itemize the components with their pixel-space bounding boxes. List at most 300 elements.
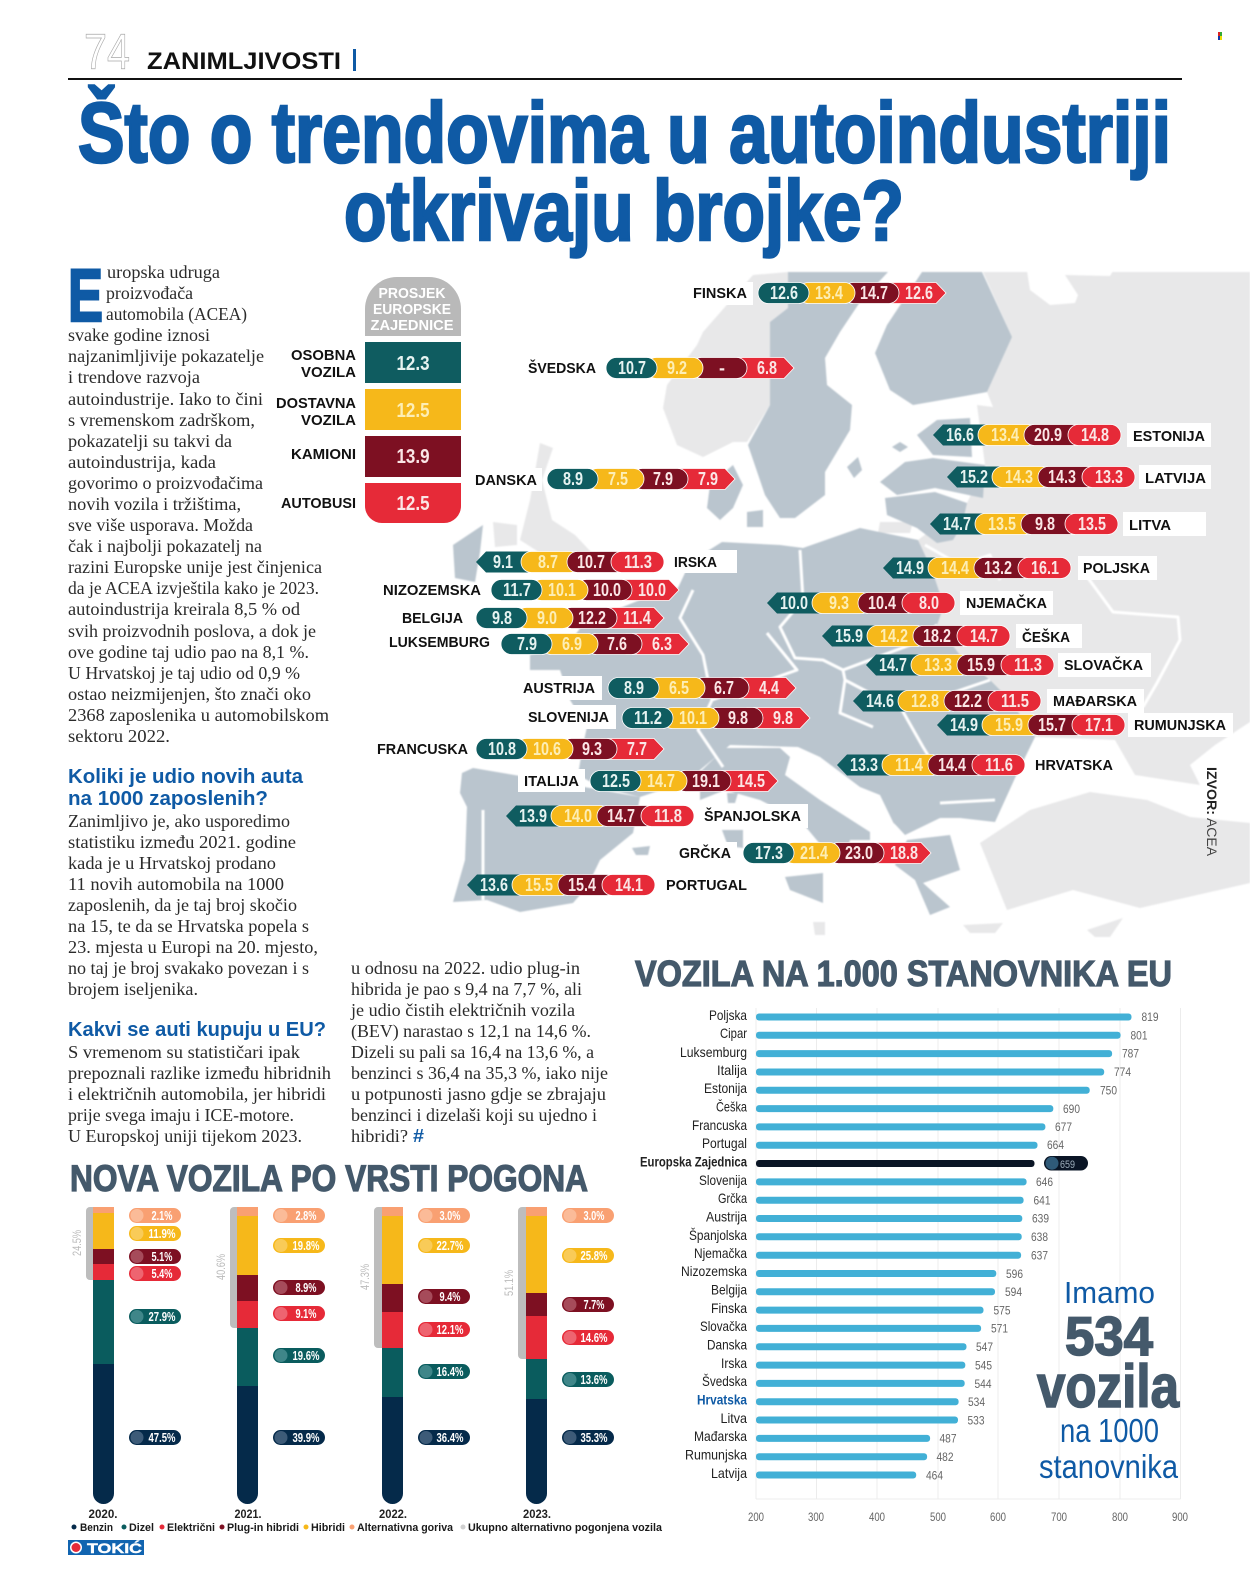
stacked bar 2021: 2021. <box>234 1507 262 1521</box>
bar chart: vehicles per 1000 inhabitants: 641 <box>1034 1194 1051 1208</box>
bar chart: vehicles per 1000 inhabitants: 500 <box>930 1510 946 1524</box>
row: Luksemburg <box>389 634 689 654</box>
bar chart: vehicles per 1000 inhabitants: Belgija <box>711 1282 747 1298</box>
row: Slovačka: 15.9 <box>967 655 995 675</box>
row: Češka: 14.2 <box>880 626 908 646</box>
intro text block: automobila (ACEA) <box>106 304 247 325</box>
bar chart: vehicles per 1000 inhabitants: 750 <box>1100 1084 1117 1098</box>
legend: EU average: VOZILA <box>301 364 356 381</box>
heading: new cars per 1000 employees: Koliki je udio novih auta <box>68 766 304 788</box>
row: Švedska: 9.2 <box>667 358 687 378</box>
row: Nizozemska: 10.1 <box>548 580 576 600</box>
bar chart: vehicles per 1000 inhabitants: 700 <box>1051 1510 1067 1524</box>
legend: EU average: KAMIONI <box>291 446 356 463</box>
text block: new cars per 1000 employees: no taj je broj svakako povezan i s <box>68 958 309 978</box>
bar chart: vehicles per 1000 inhabitants: 482 <box>936 1450 954 1464</box>
row: Mađarska: 12.8 <box>911 691 939 711</box>
text block: which cars are bought: prepoznali razlike između hibridnih <box>68 1063 331 1083</box>
row: Italija: 14.5 <box>737 771 765 791</box>
chart legend: Električni <box>167 1522 215 1534</box>
legend: EU average: 12.3 <box>396 353 430 375</box>
row: Austrija: 6.7 <box>714 678 734 698</box>
row: Rumunjska: 15.7 <box>1038 715 1066 735</box>
stacked bar 2020: 2.1% <box>152 1208 173 1223</box>
chart legend: Hibridi <box>311 1522 345 1534</box>
row: Latvija: 14.3 <box>1048 467 1076 487</box>
intro text block: ostao neizmijenjen, što znači oko <box>68 684 311 704</box>
row: Švedska: - <box>719 358 725 378</box>
bar chart: vehicles per 1000 inhabitants: 787 <box>1122 1046 1139 1060</box>
row: Italija: 12.5 <box>602 771 630 791</box>
title <box>78 85 1171 259</box>
row: Austrija <box>518 676 796 700</box>
text block: second column <box>350 958 608 1146</box>
source note <box>1204 767 1220 857</box>
bar chart: vehicles per 1000 inhabitants: Slovenija <box>699 1172 747 1188</box>
bar chart: vehicles per 1000 inhabitants: 545 <box>975 1358 992 1372</box>
row: Francuska: 7.7 <box>627 739 647 759</box>
bar chart: vehicles per 1000 inhabitants: 638 <box>1031 1230 1048 1244</box>
row: Portugal: 15.5 <box>525 875 553 895</box>
intro text block: E <box>68 254 103 337</box>
row: Francuska: 10.8 <box>488 739 516 759</box>
row: Portugal: 15.4 <box>568 875 596 895</box>
legend: EU average <box>276 277 461 523</box>
row: Hrvatska: HRVATSKA <box>1035 757 1113 774</box>
callout: 534 vehicles <box>1037 1275 1180 1485</box>
intro text block: čak i najbolji pokazatelj na <box>68 536 262 556</box>
legend: EU average: AUTOBUSI <box>281 495 356 512</box>
chart legend <box>72 1522 663 1534</box>
row: Njemačka: 8.0 <box>919 593 939 613</box>
row: Nizozemska <box>383 580 679 600</box>
row: Švedska: 6.8 <box>757 358 777 378</box>
intro text block: razini Europske unije jest činjenica <box>68 557 322 577</box>
intro text block: proizvođača <box>106 283 193 303</box>
row: Poljska: 14.9 <box>896 558 924 578</box>
row: Nizozemska: 11.7 <box>503 580 531 600</box>
row: Slovačka <box>866 653 1151 677</box>
stacked bar 2023: 25.8% <box>580 1248 608 1263</box>
stacked bar 2022: 16.4% <box>436 1364 464 1379</box>
row: Latvija: 15.2 <box>960 467 988 487</box>
row: Hrvatska: 11.4 <box>895 755 923 775</box>
text block: second column: # <box>413 1126 424 1146</box>
row: Francuska: 10.6 <box>533 739 561 759</box>
row: Irska: 8.7 <box>538 552 558 572</box>
row: Luksemburg: 6.3 <box>652 634 672 654</box>
bar chart: vehicles per 1000 inhabitants: 575 <box>994 1304 1011 1318</box>
chart legend: Benzin <box>80 1522 113 1534</box>
stacked bar 2021: 9.1% <box>296 1306 317 1321</box>
row: Mađarska: MAĐARSKA <box>1053 693 1137 710</box>
row: Nizozemska: NIZOZEMSKA <box>383 582 481 599</box>
bar chart: vehicles per 1000 inhabitants: 596 <box>1006 1267 1023 1281</box>
logo: Tokić: TOKIĆ <box>87 1539 142 1556</box>
row: Estonija: 20.9 <box>1034 425 1062 445</box>
text block: new cars per 1000 employees: 23. mjesta u Europi na 20. mjesto, <box>68 937 318 957</box>
row: Francuska: FRANCUSKA <box>377 741 468 758</box>
row: Luksemburg: 6.9 <box>562 634 582 654</box>
row: Finska <box>683 282 946 305</box>
stacked bar 2021: 19.6% <box>292 1348 320 1363</box>
row: Latvija <box>947 465 1211 489</box>
row: Slovenija: 11.2 <box>634 708 662 728</box>
row: Danska: 7.9 <box>653 469 673 489</box>
intro text block: i trendove razvoja <box>68 367 200 387</box>
row: Španjolska <box>506 804 808 828</box>
intro text block <box>68 254 329 746</box>
row: Njemačka <box>767 591 1053 615</box>
stacked bar 2020: 5.1% <box>152 1249 173 1264</box>
row: Irska: 9.1 <box>493 552 513 572</box>
row: Slovenija: 9.8 <box>773 708 793 728</box>
bar chart: vehicles per 1000 inhabitants: Poljska <box>709 1007 747 1023</box>
row: Hrvatska: 14.4 <box>938 755 966 775</box>
row: Finska: 13.4 <box>815 283 843 303</box>
bar chart: vehicles per 1000 inhabitants: Francuska <box>692 1117 747 1133</box>
intro text block: autoindustrija, kada <box>68 452 216 472</box>
row: Finska: 14.7 <box>860 283 888 303</box>
bar chart: vehicles per 1000 inhabitants: 819 <box>1142 1010 1159 1024</box>
stacked bar 2020: 2020. <box>88 1507 118 1521</box>
row: Slovačka: SLOVAČKA <box>1064 656 1143 674</box>
row: Belgija: 12.2 <box>578 608 606 628</box>
bar chart: vehicles per 1000 inhabitants: 659 <box>1060 1159 1075 1171</box>
bar chart: vehicles per 1000 inhabitants: 900 <box>1172 1510 1188 1524</box>
text block: which cars are bought: S vremenom su statističari ipak <box>68 1042 300 1062</box>
row: Litva: 9.8 <box>1035 514 1055 534</box>
bar chart: vehicles per 1000 inhabitants: Irska <box>721 1355 747 1371</box>
stacked bar 2020 <box>70 1207 181 1521</box>
text block: second column: hibrida je pao s 9,4 na 7,7 %, ali <box>351 979 582 999</box>
bar chart: vehicles per 1000 inhabitants: Češka <box>716 1098 747 1114</box>
stacked bar 2023: 2023. <box>523 1507 551 1521</box>
row: Slovačka: 13.3 <box>924 655 952 675</box>
row: Njemačka: 10.0 <box>780 593 808 613</box>
colour registration mark <box>1218 32 1222 40</box>
stacked bar 2020: 24.5% <box>70 1230 84 1256</box>
intro text block: autoindustrije. Iako to čini <box>68 389 263 409</box>
bar chart: vehicles per 1000 inhabitants: Cipar <box>720 1025 747 1041</box>
legend: EU average: PROSJEK <box>378 285 446 302</box>
row: Grčka: GRČKA <box>679 844 731 862</box>
bar chart: vehicles per 1000 inhabitants: Hrvatska <box>697 1392 747 1408</box>
bar chart: vehicles per 1000 inhabitants: 639 <box>1032 1212 1049 1226</box>
row: Belgija: 9.0 <box>537 608 557 628</box>
bar chart: vehicles per 1000 inhabitants: Portugal <box>702 1135 747 1151</box>
row: Španjolska: 14.7 <box>607 806 635 826</box>
row: Finska: FINSKA <box>693 285 747 302</box>
bar chart: vehicles per 1000 inhabitants: 400 <box>869 1510 885 1524</box>
stacked bar 2022: 9.4% <box>440 1289 461 1304</box>
row: Italija: 14.7 <box>647 771 675 791</box>
bar chart: vehicles per 1000 inhabitants: 594 <box>1005 1285 1022 1299</box>
intro text block: uropska udruga <box>107 262 220 282</box>
text block: second column: benzinci s 36,4 na 35,3 %, iako nije <box>351 1063 608 1083</box>
heading: new cars per 1000 employees <box>68 766 304 810</box>
stacked bar 2023: 35.3% <box>580 1430 608 1445</box>
bar chart: vehicles per 1000 inhabitants: Europska Zajednica <box>640 1154 747 1170</box>
row: Grčka: 23.0 <box>845 843 873 863</box>
intro text block: sektoru 2022. <box>68 726 170 746</box>
row: Slovenija <box>522 705 810 729</box>
stacked bar 2022: 36.4% <box>436 1430 464 1445</box>
intro text block: novih vozila i tržištima, <box>68 494 241 514</box>
row: Danska: 8.9 <box>563 469 583 489</box>
row: Litva: 13.5 <box>1078 514 1106 534</box>
row: Rumunjska: RUMUNJSKA <box>1134 717 1226 734</box>
row: Slovačka: 14.7 <box>879 655 907 675</box>
bar chart: vehicles per 1000 inhabitants: 774 <box>1114 1065 1131 1079</box>
text block: second column: je udio čistih električnih vozila <box>350 1000 575 1020</box>
bar chart: vehicles per 1000 inhabitants: 464 <box>926 1468 943 1482</box>
stacked bar 2023: 14.6% <box>580 1330 608 1345</box>
title: otkrivaju brojke? <box>344 164 904 259</box>
text block: new cars per 1000 employees: statistiku između 2021. godine <box>68 832 296 852</box>
row: Slovenija: 9.8 <box>728 708 748 728</box>
text block: new cars per 1000 employees: zaposlenih, da je taj broj skočio <box>68 895 297 915</box>
map of Europe <box>453 271 1250 937</box>
row: Rumunjska <box>937 713 1233 737</box>
row: Austrija: 6.5 <box>669 678 689 698</box>
row: Mađarska <box>853 689 1144 713</box>
row: Grčka <box>673 842 931 865</box>
bar chart: vehicles per 1000 inhabitants: Rumunjska <box>685 1446 747 1462</box>
logo: Tokić <box>68 1539 144 1556</box>
text block: second column: benzinci i dizelaši koji su ujedno i <box>351 1105 597 1125</box>
row: Portugal: PORTUGAL <box>666 877 747 894</box>
bar chart: vehicles per 1000 inhabitants <box>640 1007 1188 1524</box>
row: Danska <box>470 468 735 491</box>
heading: which cars are bought: Kakvi se auti kupuju u EU? <box>68 1019 326 1041</box>
row: Litva <box>930 512 1206 536</box>
row: Estonija: 13.4 <box>991 425 1019 445</box>
intro text block: autoindustrija kreirala 8,5 % od <box>68 599 300 619</box>
intro text block: najzanimljivije pokazatelje <box>68 346 264 366</box>
row: Luksemburg: 7.9 <box>517 634 537 654</box>
row: Poljska <box>883 556 1157 580</box>
bar chart: vehicles per 1000 inhabitants: Slovačka <box>700 1318 747 1334</box>
row: Belgija: 11.4 <box>623 608 651 628</box>
row: Latvija: LATVIJA <box>1145 470 1206 487</box>
row: Češka <box>822 624 1082 648</box>
intro text block: U Hrvatskoj je taj udio od 0,9 % <box>68 663 300 683</box>
legend: EU average: 12.5 <box>396 493 430 515</box>
chart legend: Ukupno alternativno pogonjena vozila <box>468 1522 663 1534</box>
chart legend: Alternativna goriva <box>357 1522 454 1534</box>
bar chart: vehicles per 1000 inhabitants: Mađarska <box>694 1428 747 1444</box>
bar chart: vehicles per 1000 inhabitants: 646 <box>1036 1175 1053 1189</box>
callout: 534 vehicles: vozila <box>1037 1353 1180 1420</box>
legend: EU average: ZAJEDNICE <box>370 317 454 334</box>
text block: which cars are bought: U Europskoj uniji tijekom 2023. <box>68 1126 302 1146</box>
bar chart: vehicles per 1000 inhabitants: Estonija <box>704 1080 747 1096</box>
row: Češka: 15.9 <box>835 626 863 646</box>
row: Portugal: 13.6 <box>480 875 508 895</box>
row: Latvija: 13.3 <box>1095 467 1123 487</box>
text block: second column: Dizeli su pali sa 16,4 na 13,6 %, a <box>351 1042 594 1062</box>
bar chart: vehicles per 1000 inhabitants: 534 <box>968 1395 985 1409</box>
row: Španjolska: 11.8 <box>654 806 682 826</box>
text block: which cars are bought: prije svega imaju i ICE-motore. <box>68 1105 294 1125</box>
row: Luksemburg: LUKSEMBURG <box>389 634 490 651</box>
row: Irska: 11.3 <box>624 552 652 572</box>
stacked bar 2023: 7.7% <box>584 1297 605 1312</box>
row: Hrvatska: 13.3 <box>850 755 878 775</box>
row: Austrija: 8.9 <box>624 678 644 698</box>
bar chart: vehicles per 1000 inhabitants: 690 <box>1063 1102 1080 1116</box>
row: Španjolska: 13.9 <box>519 806 547 826</box>
source note: IZVOR: <box>1204 767 1220 815</box>
intro text block: s vremenskom zadrškom, <box>68 410 255 430</box>
row: Luksemburg: 7.6 <box>607 634 627 654</box>
bar chart: vehicles per 1000 inhabitants: Španjolska <box>689 1227 747 1243</box>
text block: new cars per 1000 employees: 11 novih automobila na 1000 <box>68 874 284 894</box>
row: Litva: 13.5 <box>988 514 1016 534</box>
row: Poljska: 14.4 <box>941 558 969 578</box>
row: Hrvatska <box>837 753 1119 777</box>
intro text block: sve više usporava. Možda <box>68 515 253 535</box>
bar chart: vehicles per 1000 inhabitants: Nizozemska <box>681 1263 747 1279</box>
row: Slovenija: 10.1 <box>679 708 707 728</box>
chart legend: Dizel <box>129 1522 154 1534</box>
stacked bar 2020: 11.9% <box>148 1226 176 1241</box>
row: Češka: 18.2 <box>923 626 951 646</box>
stacked bar 2023: 13.6% <box>580 1372 608 1387</box>
text block: second column: u odnosu na 2022. udio plug-in <box>351 958 580 978</box>
bar chart: vehicles per 1000 inhabitants: 487 <box>940 1432 957 1446</box>
row: Nizozemska: 10.0 <box>593 580 621 600</box>
text block: new cars per 1000 employees: Zanimljivo je, ako usporedimo <box>68 811 290 831</box>
legend: EU average: OSOBNA <box>291 347 356 364</box>
row: Slovenija: SLOVENIJA <box>528 709 609 726</box>
row: Grčka: 21.4 <box>800 843 828 863</box>
row: Poljska: 16.1 <box>1031 558 1059 578</box>
row: Irska: IRSKA <box>674 554 717 571</box>
row: Irska <box>476 550 737 573</box>
source note: ACEA <box>1204 818 1220 857</box>
row: Njemačka: NJEMAČKA <box>966 594 1047 612</box>
row: Španjolska: ŠPANJOLSKA <box>704 807 801 825</box>
callout: 534 vehicles: na 1000 <box>1060 1412 1159 1449</box>
row: Mađarska: 11.5 <box>1001 691 1029 711</box>
bar chart: vehicles per 1000 inhabitants: 637 <box>1031 1248 1048 1262</box>
legend: EU average: EUROPSKE <box>373 301 451 318</box>
row: Francuska <box>377 738 664 760</box>
stacked bar 2023: 51.1% <box>502 1270 516 1296</box>
stacked bar 2020: 27.9% <box>148 1309 176 1324</box>
non-EU light land <box>493 272 1250 937</box>
text block: new cars per 1000 employees: kada je u Hrvatskoj prodano <box>68 853 276 873</box>
row: Estonija: 16.6 <box>946 425 974 445</box>
row: Njemačka: 9.3 <box>829 593 849 613</box>
row: Poljska: POLJSKA <box>1083 560 1150 577</box>
row: Belgija: 9.8 <box>492 608 512 628</box>
text block: second column: (BEV) narastao s 12,1 na 14,6 %. <box>351 1021 591 1042</box>
row: Nizozemska: 10.0 <box>638 580 666 600</box>
bar chart: vehicles per 1000 inhabitants: 544 <box>974 1377 992 1391</box>
bar chart: vehicles per 1000 inhabitants: 664 <box>1047 1138 1064 1152</box>
bar chart: vehicles per 1000 inhabitants: Njemačka <box>694 1245 747 1261</box>
row: Litva: LITVA <box>1129 517 1171 534</box>
stacked bar 2023: 3.0% <box>584 1208 605 1223</box>
row: Mađarska: 12.2 <box>954 691 982 711</box>
heading: vehicles per 1000 inhabitants: VOZILA NA 1.000 STANOVNIKA EU <box>635 953 1172 994</box>
row: Estonija: ESTONIJA <box>1133 428 1205 445</box>
stacked bar 2021: 39.9% <box>292 1430 320 1445</box>
row: Italija: ITALIJA <box>524 773 579 790</box>
stacked bar 2020: 5.4% <box>152 1266 173 1281</box>
row: Grčka: 17.3 <box>755 843 783 863</box>
section heading: ZANIMLJIVOSTI <box>147 48 341 75</box>
text block: new cars per 1000 employees <box>68 811 318 999</box>
chart legend: Plug-in hibridi <box>227 1522 299 1534</box>
row: Italija <box>518 769 778 792</box>
stacked bar 2020: 47.5% <box>148 1430 176 1445</box>
intro text block: da je ACEA izvještila kako je 2023. <box>68 578 319 598</box>
row: Švedska: ŠVEDSKA <box>528 359 596 377</box>
text block: new cars per 1000 employees: na 15, te da se Hrvatska popela s <box>68 916 309 936</box>
bar chart: vehicles per 1000 inhabitants: Austrija <box>706 1208 747 1224</box>
row: Belgija: BELGIJA <box>402 610 463 627</box>
intro text block: 2368 zaposlenika u automobilskom <box>68 705 329 725</box>
row: Estonija: 14.8 <box>1081 425 1109 445</box>
stacked bar 2022: 47.3% <box>358 1264 372 1290</box>
stacked bar 2023 <box>502 1207 614 1521</box>
bar chart: vehicles per 1000 inhabitants: Grčka <box>718 1190 747 1206</box>
row: Rumunjska: 17.1 <box>1085 715 1113 735</box>
legend: EU average: 13.9 <box>396 446 430 468</box>
stacked bar 2021: 8.9% <box>296 1280 317 1295</box>
row: Francuska: 9.3 <box>582 739 602 759</box>
borders (white) <box>483 545 1180 900</box>
intro text block: svake godine iznosi <box>68 325 210 345</box>
legend: EU average: VOZILA <box>301 412 356 429</box>
row: Portugal <box>467 873 754 897</box>
page number: 74 <box>84 24 130 80</box>
bar chart: vehicles per 1000 inhabitants: Latvija <box>711 1465 747 1481</box>
bar chart: vehicles per 1000 inhabitants: Italija <box>717 1062 747 1078</box>
text block: new cars per 1000 employees: brojem iseljenika. <box>68 979 198 999</box>
text block: which cars are bought <box>68 1042 331 1146</box>
row: Finska: 12.6 <box>770 283 798 303</box>
text block: which cars are bought: i električnih automobila, jer hibridi <box>68 1084 326 1104</box>
bar chart: vehicles per 1000 inhabitants: Luksemburg <box>680 1044 747 1060</box>
callout: 534 vehicles: Imamo <box>1064 1275 1155 1310</box>
bar chart: vehicles per 1000 inhabitants: 800 <box>1112 1510 1128 1524</box>
white sea <box>1027 271 1113 305</box>
row: Švedska: 10.7 <box>618 358 646 378</box>
row: Rumunjska: 15.9 <box>995 715 1023 735</box>
legend: EU average: 12.5 <box>396 400 430 422</box>
stacked bar 2022: 2022. <box>379 1507 407 1521</box>
row: Finska: 12.6 <box>905 283 933 303</box>
row: Danska: DANSKA <box>475 472 537 489</box>
row: Italija: 19.1 <box>692 771 720 791</box>
row: Austrija: 4.4 <box>759 678 779 698</box>
EU blue-grey land <box>453 272 1035 915</box>
legend: EU average: DOSTAVNA <box>276 395 356 412</box>
row: Slovačka: 11.3 <box>1014 655 1042 675</box>
stacked bar 2022: 22.7% <box>436 1238 464 1253</box>
bar chart: vehicles per 1000 inhabitants: 571 <box>991 1322 1008 1336</box>
row: Švedska <box>528 358 794 378</box>
heading: new cars per 1000 employees: na 1000 zaposlenih? <box>68 788 268 810</box>
stacked bar 2022: 12.1% <box>436 1322 464 1337</box>
row: Češka: 14.7 <box>970 626 998 646</box>
bar chart: vehicles per 1000 inhabitants: 600 <box>990 1510 1006 1524</box>
